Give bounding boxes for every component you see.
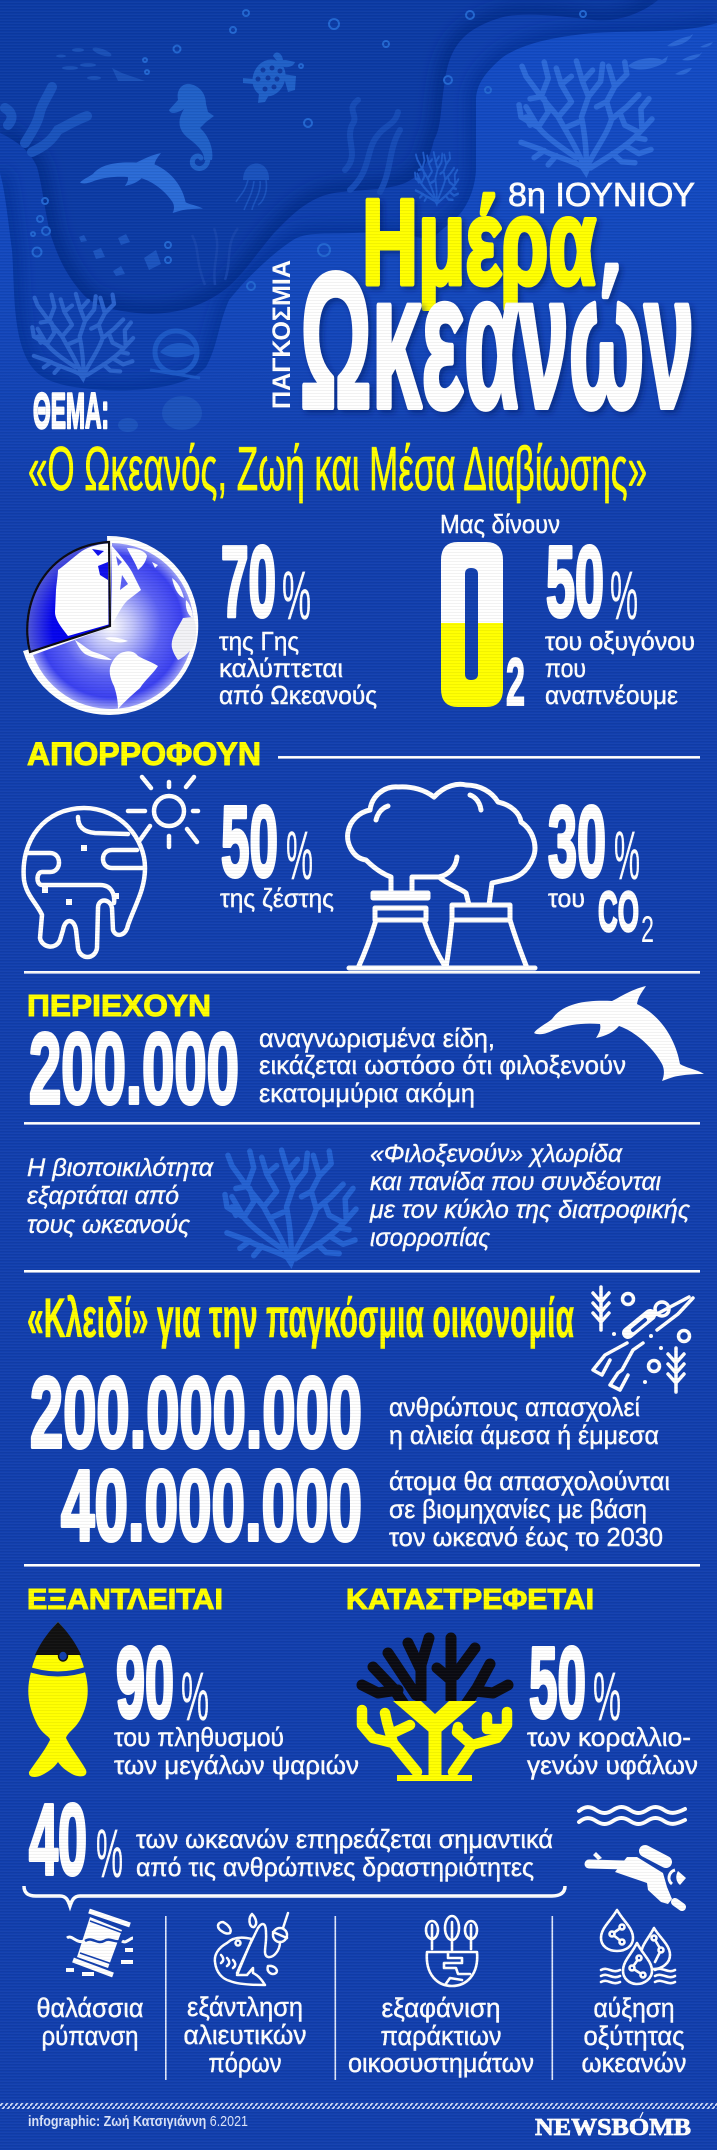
label: οικοσυστημάτων xyxy=(348,2048,534,2078)
icon: dolphin xyxy=(534,986,704,1081)
number: 30 xyxy=(548,786,606,898)
vertical label: ΠΑΓΚΟΣΜΙΑ xyxy=(268,260,296,409)
description: των ωκεανών επηρεάζεται σημαντικά xyxy=(136,1824,553,1854)
panel: globe 70%: % xyxy=(282,557,311,634)
column: coastal ecosystems xyxy=(348,1916,534,2078)
fish school left xyxy=(56,46,145,81)
description: εικάζεται ωστόσο ότι φιλοξενούν xyxy=(259,1050,626,1080)
CO2: 2 xyxy=(641,909,654,950)
number: 50 xyxy=(529,1627,586,1739)
caption: της ζέστης xyxy=(220,883,334,913)
left text: εξαρτάται από xyxy=(27,1182,179,1210)
panel: human impact 40% xyxy=(24,1784,686,1907)
panel: destroyed coral xyxy=(346,1584,698,1781)
logo: newsbomb: NEWSBOMB xyxy=(535,2115,691,2141)
fish top right xyxy=(628,34,713,75)
number: 50 xyxy=(221,786,278,898)
description: fisheries: η αλιεία άμεσα ή έμμεσα xyxy=(389,1420,659,1450)
icon: O2 half-filled xyxy=(441,542,525,720)
panel: economy xyxy=(27,1286,693,1562)
caption xyxy=(114,1722,359,1780)
caption: των μεγάλων ψαριών xyxy=(114,1750,359,1780)
left text xyxy=(27,1154,214,1239)
panel: CO2 30% xyxy=(348,784,654,968)
label xyxy=(36,1993,144,2051)
CO2: CO xyxy=(598,880,639,944)
label: παράκτιων xyxy=(380,2021,502,2051)
description: industries xyxy=(389,1466,670,1552)
label: θαλάσσια xyxy=(36,1993,144,2023)
description: αναγνωρισμένα είδη, xyxy=(259,1023,495,1053)
left text: Η βιοποικιλότητα xyxy=(27,1154,214,1182)
caption: της Γης xyxy=(219,626,299,656)
caption: από Ωκεανούς xyxy=(219,680,377,710)
icon: coral xyxy=(225,1150,356,1269)
icon: fish on hook xyxy=(215,1913,288,1985)
footer hatch band xyxy=(0,2103,717,2109)
icon: cooling towers and cloud xyxy=(348,784,535,968)
description: fisheries xyxy=(389,1392,659,1450)
coral top right xyxy=(519,61,652,178)
right text: «Φιλοξενούν» χλωρίδα xyxy=(370,1140,623,1168)
caption xyxy=(527,1722,698,1780)
caption: καλύπτεται xyxy=(219,653,343,683)
description: industries: σε βιομηχανίες με βάση xyxy=(389,1494,647,1524)
icon: half-black coral xyxy=(362,1638,508,1781)
seaweed left xyxy=(5,87,87,152)
panel: biodiversity xyxy=(27,1140,691,1269)
label: εξαφάνιση xyxy=(382,1993,500,2023)
right text: ισορροπίας xyxy=(370,1224,491,1252)
icon: barrel in water xyxy=(66,1911,133,1976)
heading: ΠΕΡΙΕΧΟΥΝ xyxy=(27,988,211,1023)
label xyxy=(582,1993,686,2078)
caption: που xyxy=(545,653,586,683)
icon: half-black fish xyxy=(25,1622,90,1777)
coral centre xyxy=(415,152,458,207)
number: 50 xyxy=(546,526,604,638)
panel: oxygen 50% xyxy=(440,509,695,720)
panel: heat 50%: % xyxy=(286,817,313,894)
left text: τους ωκεανούς xyxy=(27,1211,191,1239)
lead text: Μας δίνουν xyxy=(440,509,560,539)
caption xyxy=(219,626,377,710)
label: πόρων xyxy=(208,2048,282,2078)
title block xyxy=(268,174,695,448)
crab and round fish xyxy=(118,331,202,432)
right text: με τον κύκλο της διατροφικής xyxy=(369,1196,691,1224)
label: ωκεανών xyxy=(582,2048,686,2078)
CO2 xyxy=(598,880,654,950)
description xyxy=(136,1824,553,1882)
panel: human impact 40%: % xyxy=(96,1815,123,1892)
right text: και πανίδα που συνδέονται xyxy=(370,1168,661,1196)
icon: waves xyxy=(579,1807,685,1824)
panel: globe 70% xyxy=(23,526,377,715)
caption: γενών υφάλων xyxy=(527,1750,698,1780)
label: αλιευτικών xyxy=(184,2020,306,2050)
caption: αναπνέουμε xyxy=(545,680,678,710)
icon: scuba diver xyxy=(589,1851,686,1907)
column: ocean acidity xyxy=(582,1910,686,2078)
description: fisheries: ανθρώπους απασχολεί xyxy=(389,1392,640,1422)
number: 40 xyxy=(29,1784,87,1896)
panel: heat 50% xyxy=(24,777,334,957)
jellyfish silhouette xyxy=(236,164,269,210)
dolphin silhouette xyxy=(80,153,203,213)
icon: trees on half globe xyxy=(426,1916,477,1986)
heading: absorb: ΑΠΟΡΡΟΦΟΥΝ xyxy=(27,736,261,772)
caption: του xyxy=(548,883,585,913)
column: marine pollution xyxy=(36,1911,144,2051)
seaweed centre xyxy=(345,100,400,192)
small fish group xyxy=(79,234,161,276)
number: industries: 40.000.000 xyxy=(61,1450,362,1562)
caption: των κοραλλιο- xyxy=(527,1722,691,1752)
panel: depleted fish: % xyxy=(181,1658,209,1735)
caption: του πληθυσμού xyxy=(114,1722,284,1752)
description: από τις ανθρώπινες δραστηριότητες xyxy=(136,1852,534,1882)
label: οξύτητας xyxy=(584,2021,684,2051)
icon: O2 half-filled: 2 xyxy=(506,645,525,720)
panel: globe 70%: 70 xyxy=(221,526,276,638)
number: 90 xyxy=(116,1627,174,1739)
bubbles xyxy=(31,10,586,290)
icon: diver and sprigs xyxy=(593,1287,693,1392)
column: fish stock depletion xyxy=(184,1913,306,2078)
panel: species xyxy=(27,986,704,1125)
panel: depleted fish xyxy=(25,1584,359,1780)
panel: destroyed coral: % xyxy=(593,1658,621,1735)
icon: melting planet and sun xyxy=(24,777,198,957)
icon: molecule drops over waves xyxy=(601,1910,675,1984)
credit: infographic: Ζωή Κατσιγιάννη 6.2021 xyxy=(28,2113,248,2130)
description: industries: άτομα θα απασχολούνται xyxy=(389,1466,670,1496)
label: ρύπανση xyxy=(42,2021,138,2051)
caption xyxy=(545,626,695,710)
panel: CO2 30%: % xyxy=(614,817,640,894)
header paper-cut ocean illustration xyxy=(0,0,717,432)
heading: ΕΞΑΝΤΛΕΙΤΑΙ xyxy=(27,1584,223,1616)
label xyxy=(184,1992,306,2078)
brace xyxy=(24,1886,565,1906)
infographic canvas: ΘΕΜΑ: xyxy=(33,383,109,439)
label: εξάντληση xyxy=(187,1992,303,2022)
description: εκατομμύρια ακόμη xyxy=(259,1078,475,1108)
seaweed lower xyxy=(192,228,238,285)
coral bottom left xyxy=(32,294,133,383)
description: industries: τον ωκεανό έως το 2030 xyxy=(389,1522,663,1552)
number: fisheries: 200.000.000 xyxy=(30,1357,362,1469)
turtle silhouette xyxy=(243,53,296,103)
caption: του οξυγόνου xyxy=(545,626,695,656)
date: 8η ΙΟΥΝΙΟΥ xyxy=(508,176,695,213)
icon: globe xyxy=(23,536,198,715)
heading: ΚΑΤΑΣΤΡΕΦΕΤΑΙ xyxy=(346,1584,594,1616)
panel: oxygen 50%: % xyxy=(610,557,638,634)
number: 200.000 xyxy=(29,1013,239,1125)
quarter wedge xyxy=(27,542,110,652)
label: αύξηση xyxy=(594,1993,674,2023)
right text xyxy=(369,1140,691,1252)
seahorse silhouette xyxy=(169,84,214,169)
label xyxy=(348,1993,534,2078)
description xyxy=(259,1023,626,1108)
